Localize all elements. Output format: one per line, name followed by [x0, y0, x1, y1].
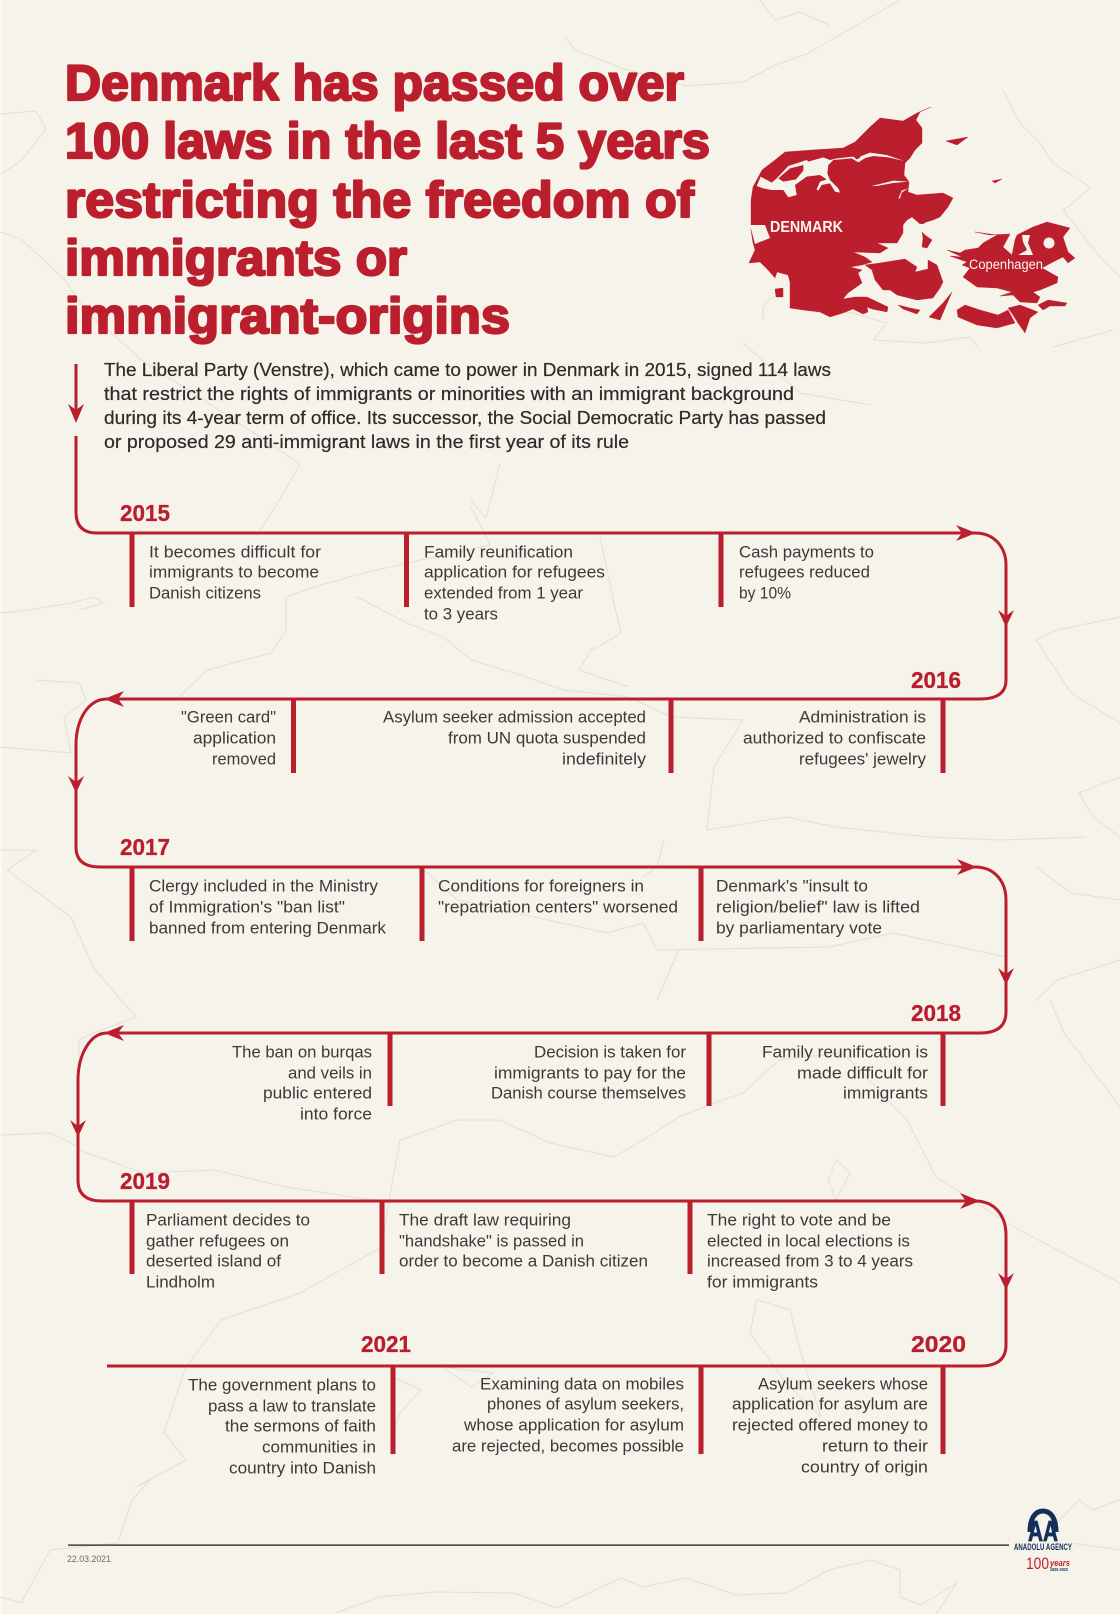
logo: Anadolu Agency: ANADOLU AGENCY — [1014, 1542, 1072, 1553]
2021 section: country into Danish — [229, 1460, 376, 1478]
2020 section: 2020 — [911, 1331, 966, 1357]
2016 section: removed — [212, 751, 276, 769]
title: 100 laws in the last 5 years — [65, 113, 710, 169]
2015 section: 2015 — [120, 500, 170, 526]
2015 section: Cash payments to — [739, 544, 874, 562]
map of Denmark — [749, 107, 1075, 333]
2019 section: deserted island of — [146, 1253, 281, 1271]
2015 section — [120, 500, 874, 624]
2018 section: Danish course themselves — [491, 1085, 686, 1103]
title — [65, 55, 710, 344]
2016 section: from UN quota suspended — [448, 730, 646, 748]
timeline path — [68, 436, 1014, 1366]
2015 section: immigrants to become — [149, 564, 319, 582]
title: immigrant-origins — [65, 288, 510, 344]
2018 section: Family reunification is — [762, 1044, 928, 1062]
intro text: that restrict the rights of immigrants or minorities with an immigrant background — [104, 384, 794, 404]
2018 section: The ban on burqas — [232, 1044, 372, 1062]
2017 section: 2017 — [120, 834, 170, 860]
2021 section: 2021 — [361, 1331, 411, 1357]
2019 section: elected in local elections is — [707, 1233, 910, 1251]
2019 section: The draft law requiring — [399, 1212, 571, 1230]
2019 section: gather refugees on — [146, 1233, 289, 1251]
2021 section — [188, 1331, 411, 1478]
2016 section: 2016 — [911, 667, 961, 693]
2020 section: whose application for asylum — [463, 1417, 684, 1435]
2016 section: authorized to confiscate — [743, 730, 926, 748]
2015 section: extended from 1 year — [424, 585, 584, 603]
2015 section: Danish citizens — [149, 585, 261, 603]
2017 section: Clergy included in the Ministry — [149, 878, 379, 896]
2015 section: application for refugees — [424, 564, 605, 582]
2020 section: rejected offered money to — [732, 1417, 928, 1435]
2020 section: are rejected, becomes possible — [452, 1438, 684, 1456]
2018 section: 2018 — [911, 1000, 961, 1026]
2018 section: public entered — [263, 1085, 372, 1103]
2017 section: of Immigration's "ban list" — [149, 899, 345, 917]
2017 section: banned from entering Denmark — [149, 920, 387, 938]
2021 section: pass a law to translate — [208, 1398, 376, 1416]
intro arrow — [68, 364, 84, 423]
2018 section — [232, 1000, 961, 1124]
2015 section: It becomes difficult for — [149, 544, 322, 562]
intro text — [104, 360, 831, 452]
2017 section: religion/belief" law is lifted — [716, 899, 920, 917]
date: 22.03.2021 — [67, 1554, 111, 1564]
2019 section: 2019 — [120, 1168, 170, 1194]
title: immigrants or — [65, 230, 407, 286]
map of Denmark: Copenhagen — [969, 257, 1043, 272]
2019 section: Lindholm — [146, 1274, 215, 1292]
2019 section — [120, 1168, 913, 1292]
2018 section: Decision is taken for — [534, 1044, 687, 1062]
map of Denmark: DENMARK — [770, 219, 844, 236]
logo: Anadolu Agency: AA — [1028, 1516, 1058, 1548]
logo: Anadolu Agency: 100 — [1026, 1554, 1049, 1573]
2020 section: country of origin — [801, 1459, 928, 1477]
2019 section: Parliament decides to — [146, 1212, 310, 1230]
2018 section: and veils in — [288, 1065, 372, 1083]
2018 section: immigrants to pay for the — [494, 1065, 686, 1083]
title: Denmark has passed over — [65, 55, 684, 111]
logo: Anadolu Agency — [1014, 1511, 1072, 1573]
2015 section: by 10% — [739, 585, 791, 603]
2016 section: application — [193, 730, 276, 748]
2020 section: return to their — [822, 1438, 929, 1456]
2017 section: Denmark's "insult to — [716, 878, 868, 896]
2019 section: order to become a Danish citizen — [399, 1253, 648, 1271]
2017 section — [120, 834, 920, 941]
2016 section: indefinitely — [562, 751, 647, 769]
2016 section: refugees' jewelry — [799, 751, 927, 769]
2019 section: The right to vote and be — [707, 1212, 891, 1230]
2020 section — [452, 1331, 966, 1477]
logo: Anadolu Agency: years — [1049, 1558, 1070, 1568]
2020 section: application for asylum are — [732, 1396, 928, 1414]
logo: Anadolu Agency: 1920-2020 — [1050, 1567, 1068, 1572]
intro text: during its 4-year term of office. Its successor, the Social Democratic Party has passed — [104, 408, 826, 428]
2019 section: for immigrants — [707, 1274, 818, 1292]
2018 section: immigrants — [843, 1085, 928, 1103]
intro text: or proposed 29 anti-immigrant laws in the first year of its rule — [104, 432, 629, 452]
2015 section: to 3 years — [424, 606, 498, 624]
2016 section: Administration is — [799, 709, 926, 727]
2015 section: Family reunification — [424, 544, 573, 562]
2021 section: The government plans to — [188, 1377, 376, 1395]
2015 section: refugees reduced — [739, 564, 870, 582]
2017 section: by parliamentary vote — [716, 920, 882, 938]
2020 section: Examining data on mobiles — [480, 1376, 684, 1394]
2021 section: the sermons of faith — [225, 1418, 376, 1436]
2017 section: "repatriation centers" worsened — [438, 899, 678, 917]
2016 section: Asylum seeker admission accepted — [383, 709, 646, 727]
2020 section: Asylum seekers whose — [758, 1376, 928, 1394]
2020 section: phones of asylum seekers, — [487, 1396, 684, 1414]
title: restricting the freedom of — [65, 172, 694, 228]
2019 section: "handshake" is passed in — [399, 1233, 584, 1251]
2018 section: into force — [300, 1106, 372, 1124]
2021 section: communities in — [262, 1439, 376, 1457]
2018 section: made difficult for — [797, 1065, 929, 1083]
2016 section: "Green card" — [181, 709, 276, 727]
intro text: The Liberal Party (Venstre), which came to power in Denmark in 2015, signed 114 laws — [104, 360, 831, 380]
2019 section: increased from 3 to 4 years — [707, 1253, 913, 1271]
2017 section: Conditions for foreigners in — [438, 878, 644, 896]
2016 section — [181, 667, 961, 773]
footer rule — [68, 1544, 1009, 1546]
